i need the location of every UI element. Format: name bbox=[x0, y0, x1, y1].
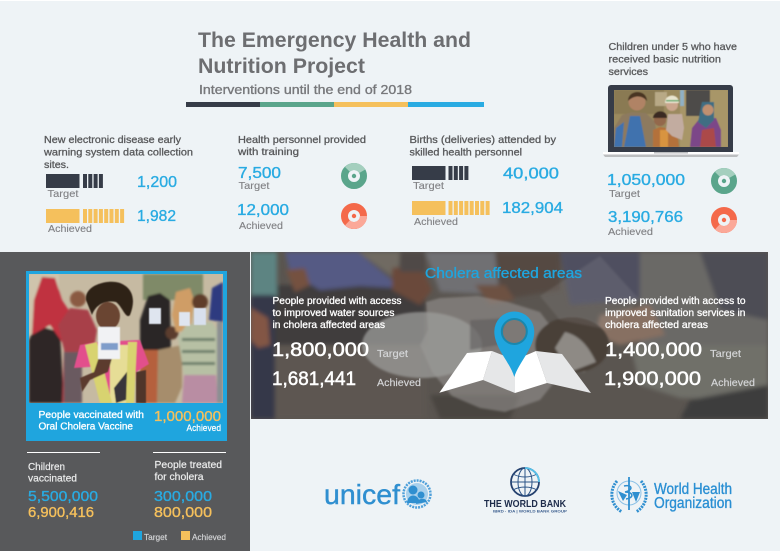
section heading: Cholera affected areas bbox=[425, 265, 582, 282]
achieved value: 12,000 bbox=[237, 202, 289, 219]
title bbox=[198, 28, 471, 78]
right achieved: 1,900,000 bbox=[604, 369, 701, 390]
icon: green donut bbox=[714, 168, 735, 190]
left achieved bbox=[272, 369, 421, 390]
target value: 40,000 bbox=[503, 166, 559, 182]
achieved value: 182,904 bbox=[502, 200, 563, 217]
panel: health personnel trained bbox=[237, 134, 367, 232]
subtitle: Interventions until the end of 2018 bbox=[199, 82, 412, 97]
people treated block: 300,000 bbox=[154, 488, 212, 505]
left achieved: Achieved bbox=[377, 377, 421, 389]
icon: orange donut bbox=[344, 206, 367, 229]
left target bbox=[272, 340, 408, 361]
title: Nutrition Project bbox=[198, 54, 365, 78]
logo: world health organization: World Health bbox=[654, 481, 732, 498]
heading bbox=[410, 134, 557, 158]
right description: improved sanitation services in bbox=[605, 307, 746, 319]
achieved label: Achieved bbox=[414, 216, 458, 228]
children vaccinated block bbox=[27, 452, 100, 521]
right description bbox=[605, 295, 746, 331]
logo: unicef: unicef bbox=[324, 479, 400, 510]
target value: 1,200 bbox=[137, 174, 177, 191]
right target: Target bbox=[710, 348, 741, 360]
vaccination card frame bbox=[26, 271, 227, 441]
icon: green donut bbox=[344, 163, 365, 186]
card caption bbox=[38, 409, 144, 432]
logo: the world bank: THE WORLD BANK bbox=[484, 499, 567, 510]
left target: 1,800,000 bbox=[272, 340, 369, 361]
children vaccinated block: vaccinated bbox=[28, 472, 77, 484]
left achieved: 1,681,441 bbox=[272, 369, 356, 390]
heading: sites. bbox=[44, 159, 69, 171]
panel: children nutrition services bbox=[603, 41, 739, 238]
achieved label: Achieved bbox=[48, 223, 92, 235]
heading: New electronic disease early bbox=[44, 134, 182, 146]
card label: Achieved bbox=[186, 423, 221, 433]
icon: unicef emblem bbox=[404, 480, 430, 508]
heading: services bbox=[608, 66, 648, 78]
right achieved bbox=[604, 369, 755, 390]
left target: Target bbox=[377, 348, 408, 360]
panel: cholera affected areas bbox=[251, 252, 768, 419]
logo: the world bank: IBRD · IDA | WORLD BANK GROUP bbox=[493, 508, 567, 514]
panel: disease early warning sites bbox=[43, 134, 193, 235]
logo: the world bank bbox=[484, 468, 567, 514]
children vaccinated block: 6,900,416 bbox=[28, 504, 94, 521]
logo: world health organization bbox=[612, 477, 732, 512]
right achieved: Achieved bbox=[711, 377, 755, 389]
logo: world health organization: Organization bbox=[654, 495, 732, 512]
heading: Health personnel provided bbox=[238, 134, 366, 146]
right description: People provided with access to bbox=[605, 295, 746, 307]
card caption: Oral Cholera Vaccine bbox=[38, 420, 133, 432]
children vaccinated block: 5,500,000 bbox=[28, 488, 98, 505]
heading bbox=[237, 134, 366, 158]
achieved bar bbox=[412, 201, 490, 215]
photo: hands around a water bowl with dark overlay bbox=[251, 252, 768, 419]
achieved value: 1,982 bbox=[137, 208, 176, 225]
left description bbox=[272, 295, 402, 331]
title: The Emergency Health and bbox=[198, 28, 471, 52]
heading: received basic nutrition bbox=[608, 54, 721, 66]
target value: 1,050,000 bbox=[607, 172, 685, 189]
achieved label: Achieved bbox=[239, 220, 283, 232]
people treated block: 800,000 bbox=[154, 504, 212, 521]
photo: children bbox=[614, 90, 728, 147]
target label: Target bbox=[609, 188, 640, 200]
achieved label: Achieved bbox=[608, 226, 653, 238]
children vaccinated block: Children bbox=[28, 461, 65, 473]
target bar bbox=[412, 166, 468, 180]
left description: to improved water sources bbox=[272, 307, 394, 319]
right description: cholera affected areas bbox=[605, 319, 708, 331]
panel: oral cholera vaccine sidebar bbox=[0, 252, 250, 551]
heading bbox=[608, 41, 737, 78]
achieved value: 3,190,766 bbox=[608, 209, 683, 226]
left description: in cholera affected areas bbox=[272, 319, 385, 331]
heading: skilled health personnel bbox=[410, 146, 522, 158]
card caption: People vaccinated with bbox=[38, 409, 144, 421]
legend: Achieved bbox=[192, 532, 226, 542]
heading: with training bbox=[237, 146, 299, 158]
panel: births attended bbox=[410, 134, 563, 228]
icon: who emblem bbox=[612, 477, 646, 512]
target label: Target bbox=[238, 180, 270, 192]
legend bbox=[133, 531, 226, 542]
card value: 1,000,000 bbox=[154, 408, 221, 425]
icon: folded map bbox=[439, 351, 591, 393]
target label: Target bbox=[48, 188, 79, 200]
right target: 1,400,000 bbox=[605, 340, 702, 361]
icon: location pin bbox=[494, 312, 534, 377]
achieved bar bbox=[46, 209, 124, 223]
target bar bbox=[46, 174, 103, 188]
icon: laptop with photo of children bbox=[603, 85, 739, 157]
people treated block: People treated bbox=[154, 459, 222, 471]
left description: People provided with access bbox=[272, 295, 402, 307]
heading bbox=[43, 134, 193, 171]
target value: 7,500 bbox=[238, 165, 281, 182]
heading: Children under 5 who have bbox=[608, 41, 737, 53]
four colour title rule bbox=[186, 102, 484, 107]
people treated block bbox=[153, 452, 226, 521]
target label: Target bbox=[413, 180, 444, 192]
right target bbox=[605, 340, 741, 361]
photo: girl holding vaccination card bbox=[29, 274, 223, 403]
icon: globe bbox=[511, 468, 539, 496]
heading: warning system data collection bbox=[43, 146, 193, 158]
legend: Target bbox=[144, 532, 168, 542]
icon: orange donut bbox=[714, 210, 737, 233]
heading: Births (deliveries) attended by bbox=[410, 134, 557, 146]
people treated block: for cholera bbox=[154, 471, 204, 483]
